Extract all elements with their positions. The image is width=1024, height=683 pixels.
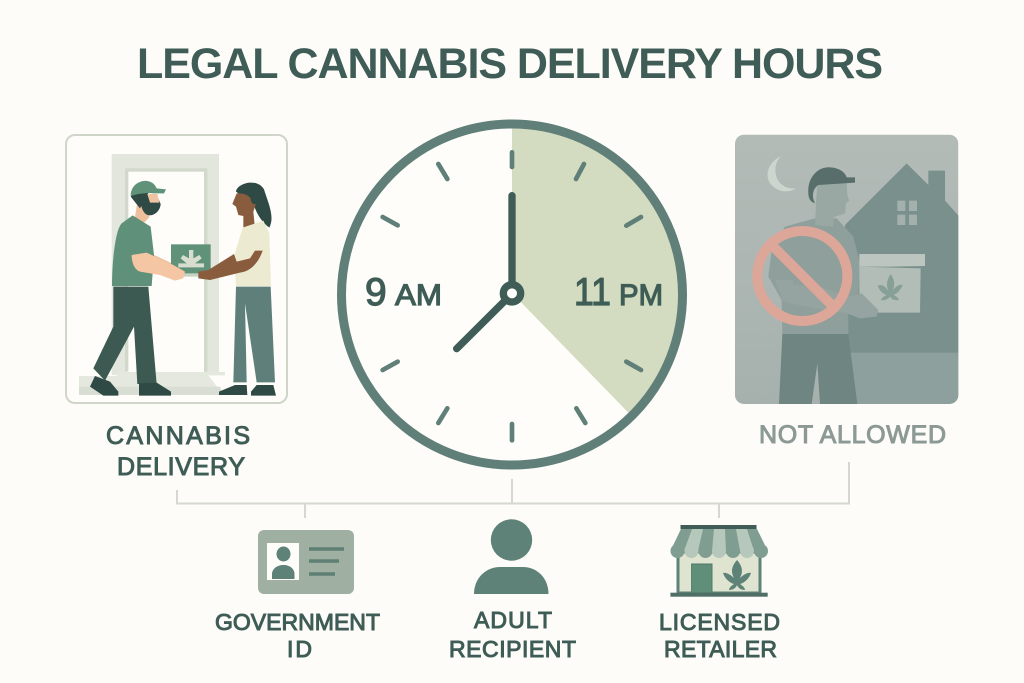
label: government id xyxy=(215,609,380,662)
clock xyxy=(342,124,682,465)
moon xyxy=(768,157,796,191)
title: LEGAL CANNABIS DELIVERY HOURS xyxy=(137,40,883,88)
panel: not allowed illustration xyxy=(735,135,960,404)
label: cannabis delivery: CANNABIS xyxy=(106,422,250,450)
label: licensed retailer: LICENSED xyxy=(659,609,780,635)
label: adult recipient: ADULT xyxy=(474,607,552,633)
icon: government id xyxy=(258,530,354,594)
clock face xyxy=(342,124,682,465)
recipient xyxy=(198,183,276,396)
hour ticks xyxy=(383,152,641,440)
delivery person xyxy=(90,181,173,396)
clock ring xyxy=(342,124,682,465)
icon: adult recipient xyxy=(474,519,548,594)
panel: cannabis delivery illustration xyxy=(66,135,287,403)
package xyxy=(171,244,211,277)
icon: licensed retailer xyxy=(670,525,768,597)
door frame xyxy=(79,154,225,395)
label: 11 PM: 11 xyxy=(574,271,611,314)
house xyxy=(845,163,960,404)
label: not allowed: NOT ALLOWED xyxy=(759,421,946,449)
label: 9 AM: AM xyxy=(395,279,442,312)
clock hands xyxy=(457,196,521,349)
label: 9 AM: 9 xyxy=(365,271,387,314)
label: 9 AM xyxy=(365,271,442,314)
label: adult recipient: RECIPIENT xyxy=(449,636,576,662)
label: government id: ID xyxy=(287,636,312,662)
label: 11 PM: PM xyxy=(619,279,663,312)
label: government id: GOVERNMENT xyxy=(215,609,380,635)
package xyxy=(859,254,925,313)
prohibition sign xyxy=(757,231,847,321)
person xyxy=(768,167,860,404)
label: cannabis delivery: DELIVERY xyxy=(117,453,245,481)
delivery person arm xyxy=(132,253,185,281)
connector lines xyxy=(177,462,849,518)
allowed hours wedge xyxy=(512,124,682,416)
label: cannabis delivery xyxy=(106,422,250,481)
label: adult recipient xyxy=(449,607,576,662)
label: licensed retailer: RETAILER xyxy=(664,636,777,662)
label: licensed retailer xyxy=(659,609,780,662)
arm xyxy=(848,294,878,318)
label: 11 PM xyxy=(574,271,663,314)
